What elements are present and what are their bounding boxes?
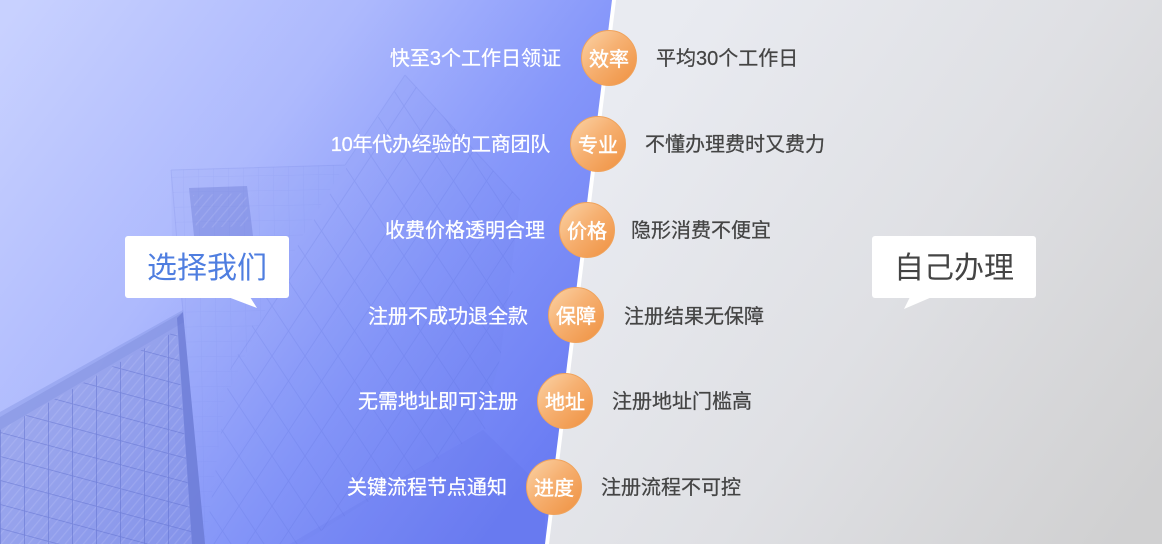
row 2 badge	[570, 116, 626, 172]
row 4 badge: 保障	[556, 306, 596, 328]
row 2 right text: 不懂办理费时又费力	[645, 134, 825, 156]
row 3 badge: 价格	[567, 221, 607, 243]
callout: 自己办理: 自己办理	[894, 252, 1014, 285]
row 6 badge: 进度	[534, 478, 574, 500]
row 2 badge: 专业	[578, 135, 618, 157]
row 1 left text: 快至3个工作日领证	[390, 48, 561, 70]
callout: 自己办理	[872, 236, 1036, 298]
row 6 left text: 关键流程节点通知	[347, 477, 507, 499]
row 4 right text: 注册结果无保障	[624, 306, 764, 328]
callout: 选择我们: 选择我们	[147, 252, 267, 285]
row 5 badge	[537, 373, 593, 429]
row 1 right text: 平均30个工作日	[656, 48, 798, 70]
row 2 left text: 10年代办经验的工商团队	[331, 134, 550, 156]
row 5 right text: 注册地址门槛高	[612, 391, 752, 413]
row 6 right text: 注册流程不可控	[601, 477, 741, 499]
row 1 badge	[581, 30, 637, 86]
row 5 left text: 无需地址即可注册	[358, 391, 518, 413]
row 1 badge: 效率	[589, 49, 629, 71]
callout: 选择我们	[125, 236, 289, 298]
row 5 badge: 地址	[545, 392, 585, 414]
row 4 left text: 注册不成功退全款	[368, 306, 528, 328]
row 3 left text: 收费价格透明合理	[385, 220, 545, 242]
row 6 badge	[526, 459, 582, 515]
row 3 right text: 隐形消费不便宜	[631, 220, 771, 242]
row 4 badge	[548, 287, 604, 343]
row 3 badge	[559, 202, 615, 258]
